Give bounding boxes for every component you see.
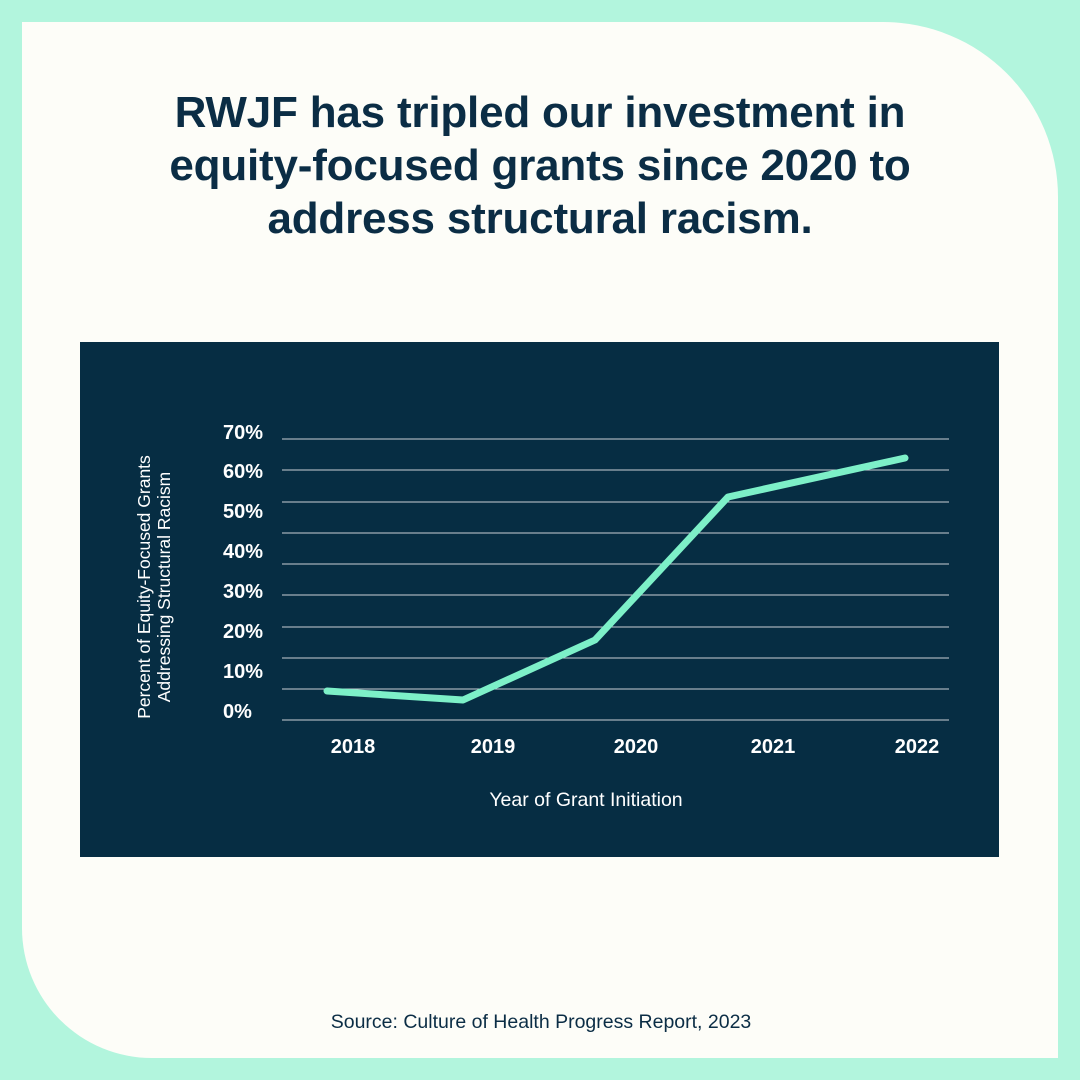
panel: line chart [80,342,999,857]
y axis title [134,455,174,719]
y axis labels: 0% [223,701,252,723]
y axis labels: 50% [223,501,263,523]
y axis labels: 10% [223,661,263,683]
x axis labels [331,736,939,758]
y axis title: Addressing Structural Racism [154,472,174,702]
x axis title: Year of Grant Initiation [489,789,683,811]
y axis labels [223,422,263,723]
x axis labels: 2019 [471,736,515,758]
title: address structural racism. [267,194,813,243]
y axis labels: 40% [223,541,263,563]
y axis labels: 60% [223,461,263,483]
y axis labels: 20% [223,621,263,643]
data line [327,458,905,700]
x axis labels: 2020 [614,736,658,758]
x axis labels: 2018 [331,736,375,758]
y axis title: Percent of Equity-Focused Grants [134,455,154,719]
x axis labels: 2022 [895,736,939,758]
title [169,88,911,243]
y axis labels: 70% [223,422,263,444]
title: RWJF has tripled our investment in [175,88,905,137]
x axis labels: 2021 [751,736,795,758]
source: Source: Culture of Health Progress Report, 2023 [331,1011,751,1033]
title: equity-focused grants since 2020 to [169,141,911,190]
y axis labels: 30% [223,581,263,603]
